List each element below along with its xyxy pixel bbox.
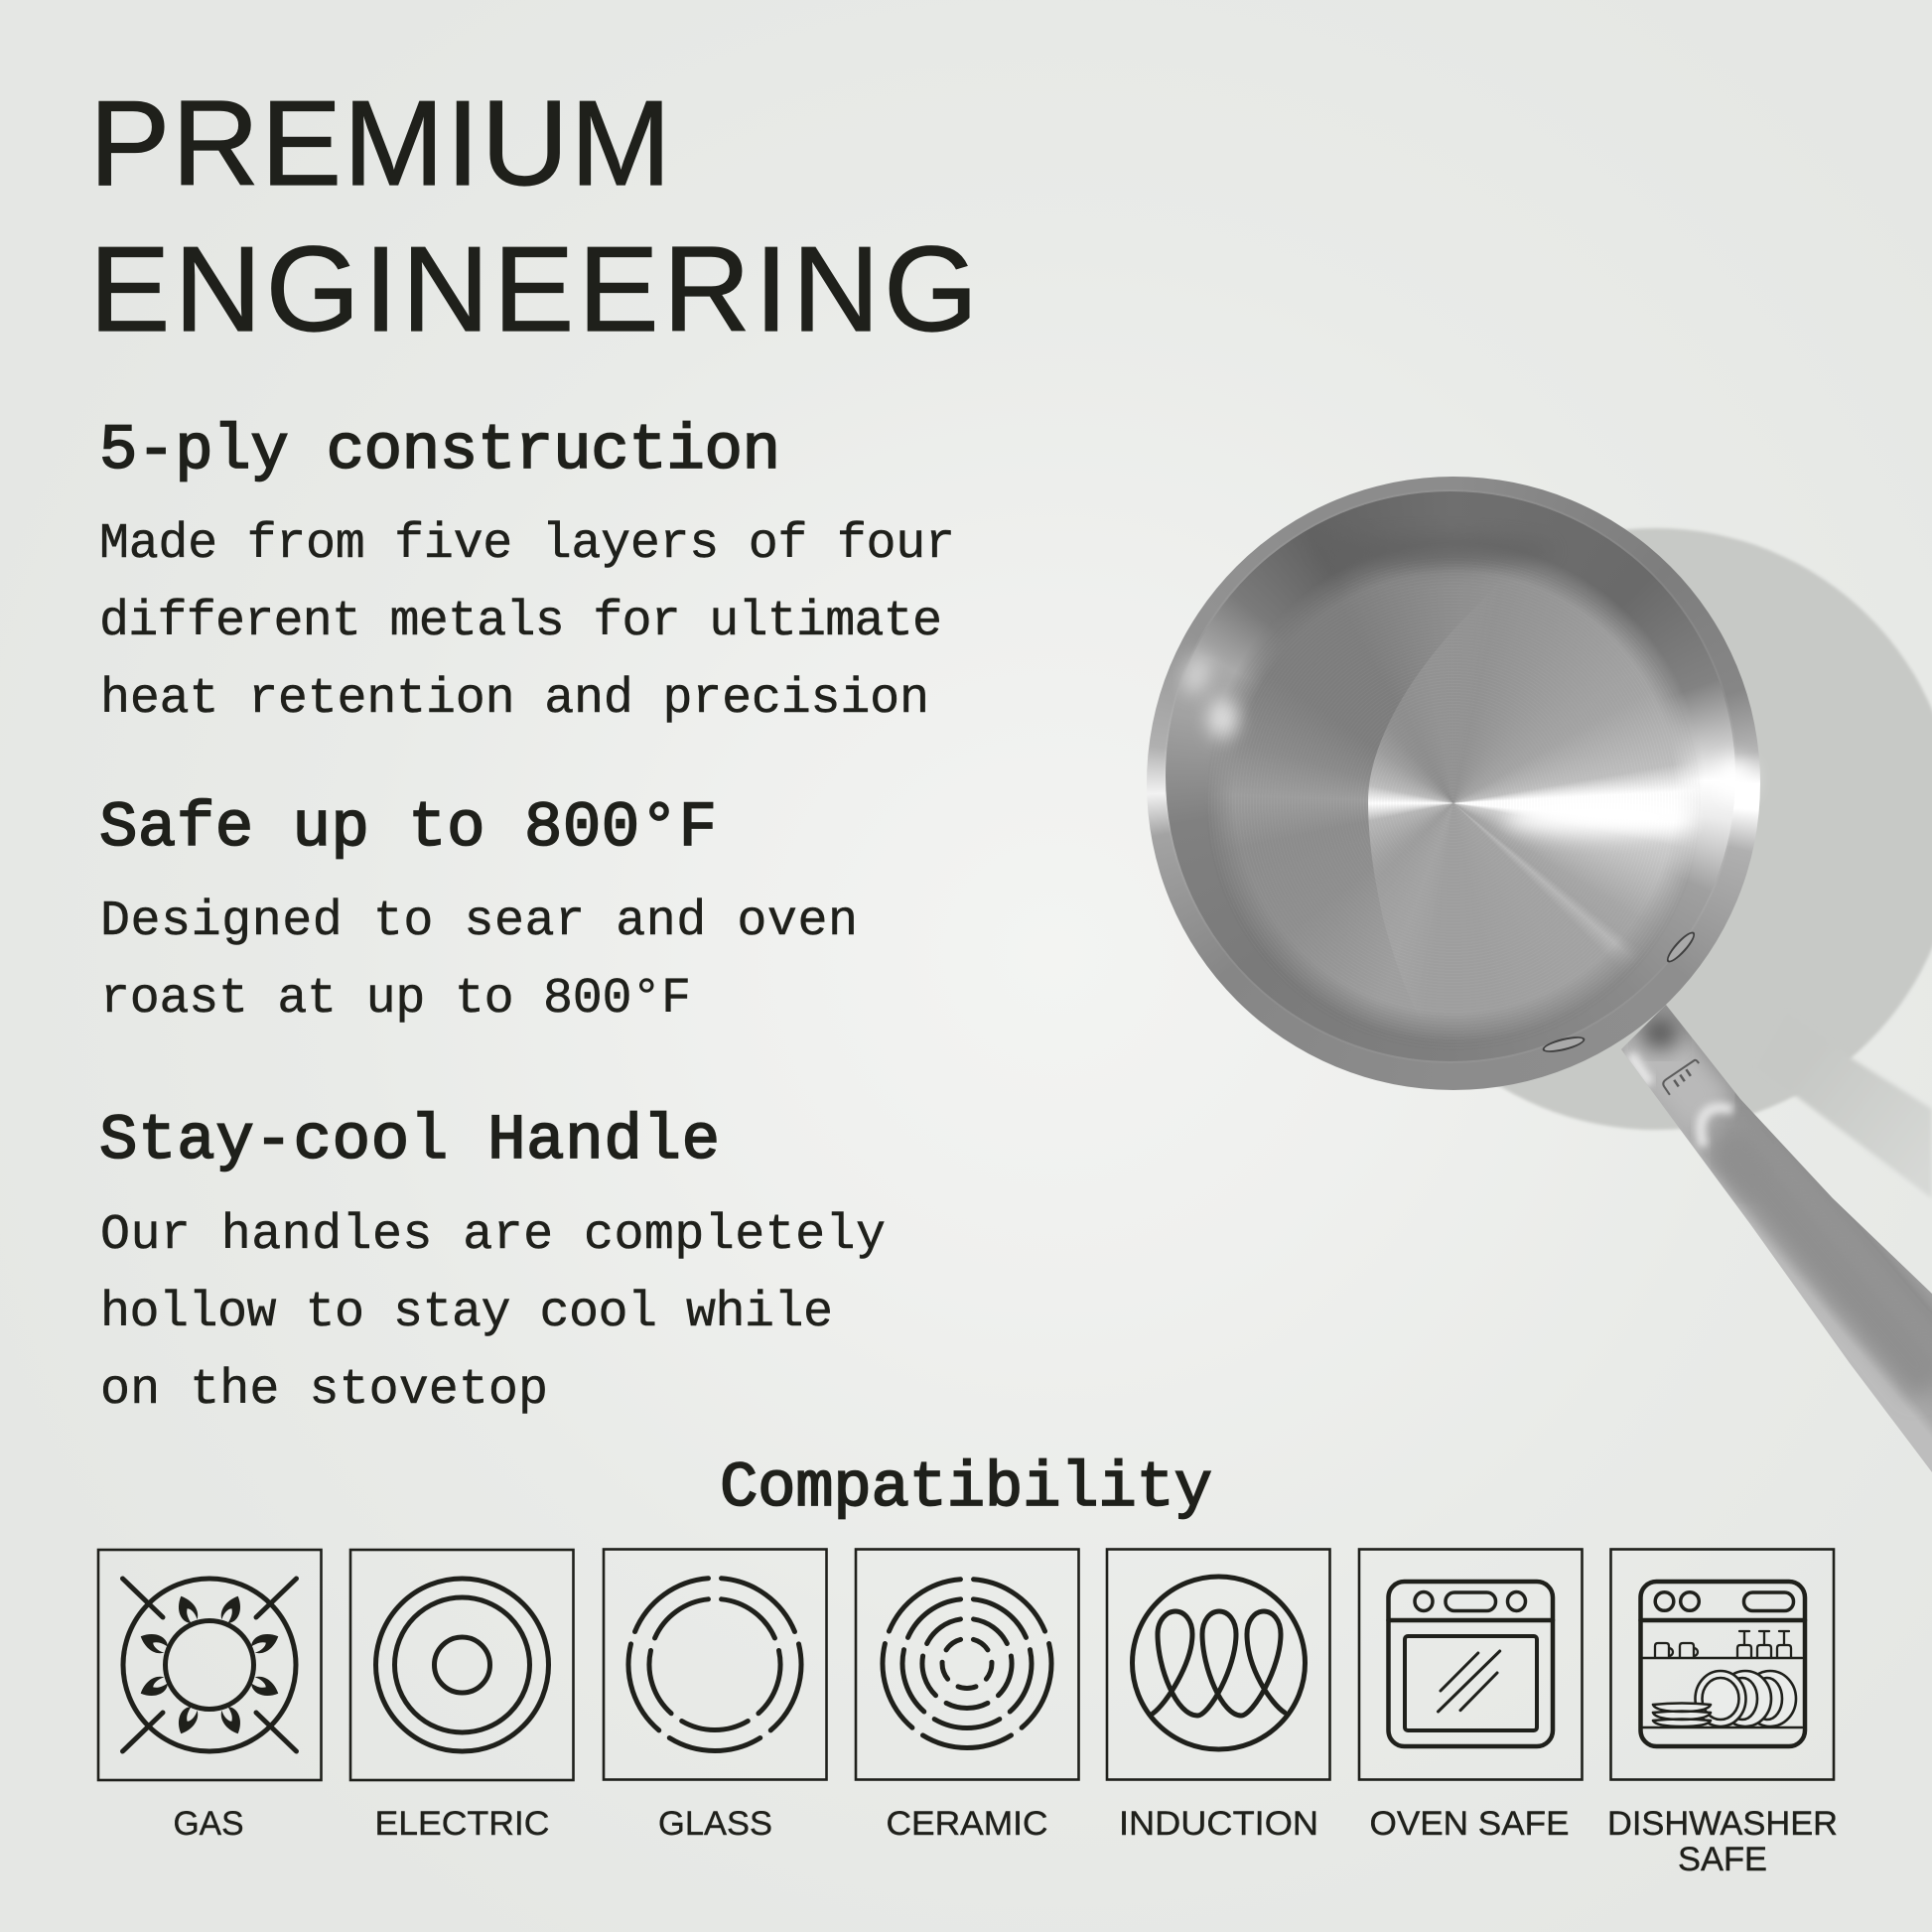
section: safe up to 800F: Designed to sear and oven: [100, 894, 858, 950]
icon: glass: [604, 1549, 826, 1843]
icon: oven safe: [1359, 1549, 1583, 1843]
icon: gas: GAS: [173, 1805, 244, 1843]
rivet lower: [1541, 1034, 1587, 1055]
lighter spun centre region of floor: [1368, 649, 1453, 909]
pan inner wall: [1166, 491, 1735, 1061]
icon: dishwasher safe: SAFE: [1678, 1841, 1767, 1878]
brushed circular texture: [1206, 556, 1701, 1050]
pan body: [1147, 477, 1760, 1090]
rivet right: [1663, 928, 1699, 966]
compatibility heading: Compatibility: [720, 1453, 1212, 1525]
handle logo stamp: [1662, 1059, 1705, 1095]
icon: induction: INDUCTION: [1119, 1805, 1318, 1843]
title: PREMIUM: [89, 75, 671, 210]
pan floor with radial brushed metal: [1215, 556, 1696, 1035]
section: stay-cool handle: [99, 1106, 886, 1419]
section: 5-ply construction: Made from five layers of four: [99, 516, 955, 573]
title: ENGINEERING: [89, 221, 978, 356]
section: safe up to 800F: roast at up to 800°F: [100, 971, 691, 1028]
pan handle: [1621, 1005, 1932, 1472]
title: [89, 75, 978, 356]
icon: gas: [98, 1550, 322, 1843]
section: 5-ply construction: 5-ply construction: [99, 416, 780, 487]
icon: dishwasher safe: DISHWASHER: [1607, 1805, 1838, 1843]
section: stay-cool handle: Stay-cool Handle: [99, 1106, 720, 1177]
icon: dishwasher safe: [1607, 1549, 1838, 1878]
pan outer rim: [1147, 477, 1760, 1090]
dark crescent at top of floor: [1315, 536, 1554, 566]
section: 5-ply construction: [99, 416, 955, 728]
icon: oven safe: OVEN SAFE: [1370, 1805, 1569, 1843]
icon: glass: GLASS: [658, 1805, 772, 1843]
section: stay-cool handle: Our handles are completely: [100, 1207, 886, 1264]
section: stay-cool handle: on the stovetop: [100, 1362, 548, 1419]
section: 5-ply construction: different metals for ultimate: [99, 594, 942, 650]
left reflection spot: [1208, 699, 1238, 739]
right highlight glow: [1504, 800, 1693, 834]
icon: electric: [350, 1550, 574, 1843]
icon: ceramic: CERAMIC: [886, 1805, 1048, 1843]
icon: electric: ELECTRIC: [375, 1805, 550, 1843]
left reflections: [1178, 652, 1214, 698]
section: safe up to 800F: [99, 793, 858, 1028]
section: safe up to 800F: Safe up to 800°F: [99, 793, 717, 865]
section: stay-cool handle: hollow to stay cool while: [100, 1285, 833, 1341]
icon: induction: [1107, 1549, 1330, 1843]
rim highlight glow: [1717, 759, 1752, 799]
icon: ceramic: [856, 1549, 1078, 1843]
section: 5-ply construction: heat retention and precision: [100, 671, 929, 728]
